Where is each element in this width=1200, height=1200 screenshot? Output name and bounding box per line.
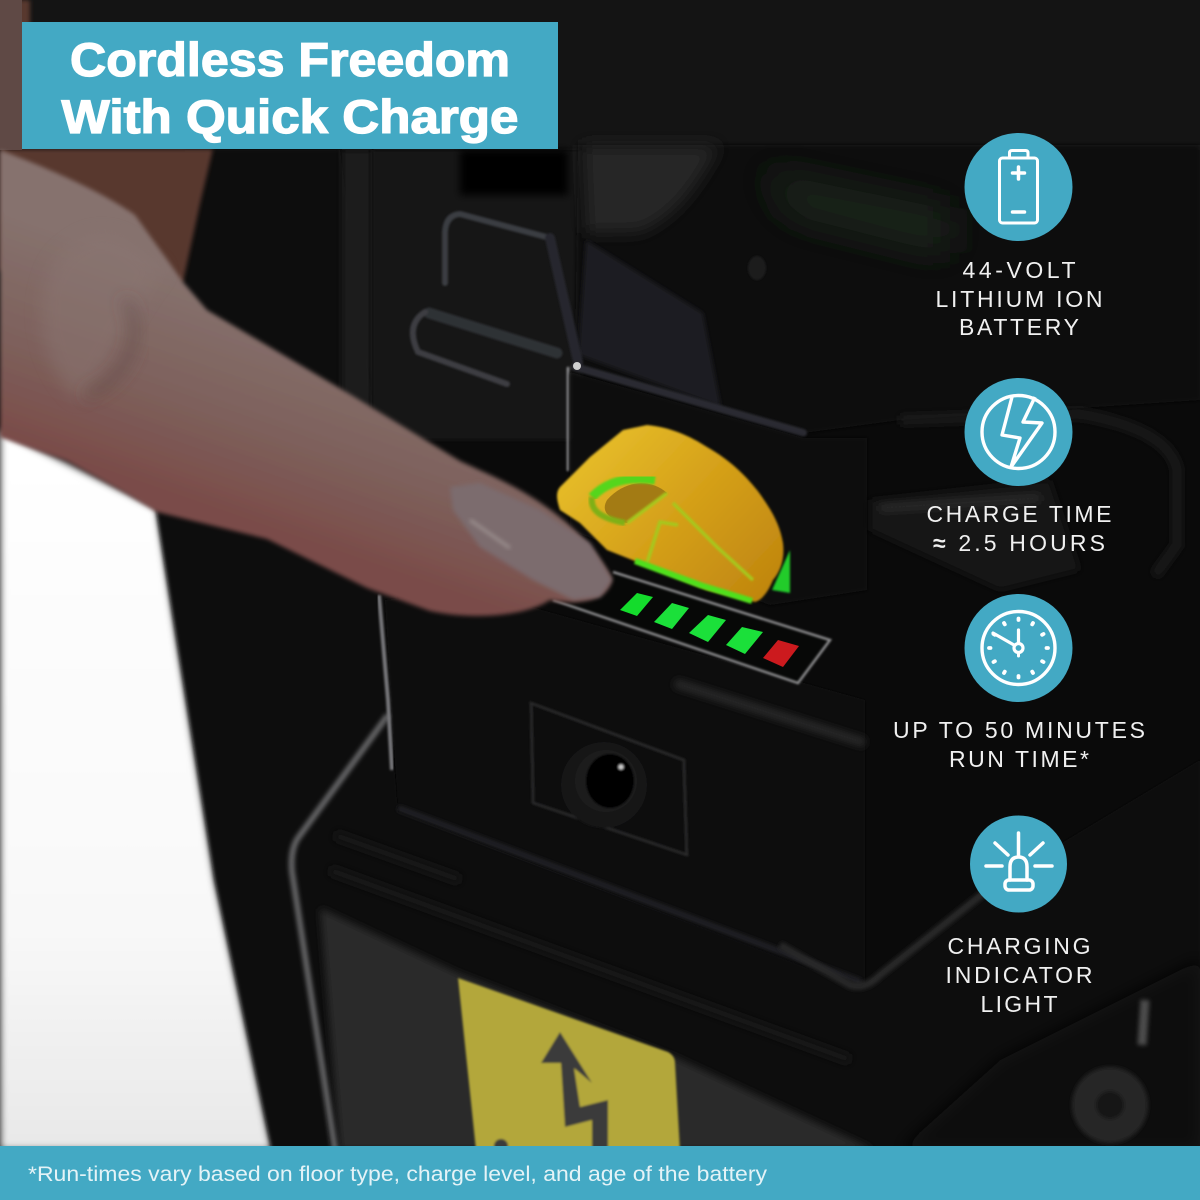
label: charging indicator light: [946, 933, 1092, 1017]
vertical metal wire: [379, 595, 392, 770]
right side handle loop: [870, 414, 1177, 590]
title text: [62, 33, 518, 143]
label: run time: UP TO 50 MINUTES: [893, 717, 1145, 743]
label: 44-volt battery: [936, 257, 1102, 340]
lower housing: [292, 715, 1200, 1150]
footnote: *Run-times vary based on floor type, charge level, and age of the battery: [28, 1163, 768, 1186]
icon: battery: [964, 133, 1072, 241]
wire highlight: [573, 362, 581, 370]
icon: lightning bolt: [964, 378, 1072, 486]
title banner: [22, 22, 558, 149]
label: charging indicator light: CHARGING: [948, 933, 1090, 959]
label: 44-volt battery: LITHIUM ION: [936, 286, 1102, 312]
white background at left: [0, 430, 272, 1150]
feature: charge time: [926, 378, 1112, 556]
rear knob detail: [1072, 1000, 1148, 1143]
LED indicator bar: [553, 572, 830, 683]
label: charge time: CHARGE TIME: [926, 501, 1112, 527]
label: charging indicator light: LIGHT: [980, 991, 1058, 1017]
title text: Cordless Freedom: [70, 33, 510, 86]
yellow latch knob: [557, 425, 790, 602]
label: charging indicator light: INDICATOR: [946, 962, 1092, 988]
vacuum side panel: [157, 150, 400, 1150]
battery clip handle: [413, 214, 803, 470]
feature: run time: [893, 594, 1145, 772]
label: charge time: [926, 501, 1112, 556]
footer band: [0, 1146, 1200, 1200]
latch box: [570, 372, 867, 605]
battery body: [385, 590, 865, 985]
knuckle and index finger: [0, 150, 612, 616]
hand shadow area: [0, 0, 213, 300]
label: run time: [893, 717, 1145, 772]
label: 44-volt battery: 44-VOLT: [962, 257, 1076, 283]
fingernail: [450, 483, 612, 600]
feature: indicator light: [946, 816, 1092, 1017]
label: run time: RUN TIME*: [949, 746, 1089, 772]
label: 44-volt battery: BATTERY: [959, 314, 1079, 340]
title text: With Quick Charge: [62, 90, 518, 143]
label: charge time: ≈ 2.5 HOURS: [933, 530, 1105, 556]
icon: clock: [964, 594, 1072, 702]
upper column: [575, 145, 1200, 433]
feature: battery: [936, 133, 1102, 340]
icon: beacon light: [970, 816, 1067, 912]
charging port: [531, 703, 687, 855]
yellow warning label: [458, 978, 680, 1153]
